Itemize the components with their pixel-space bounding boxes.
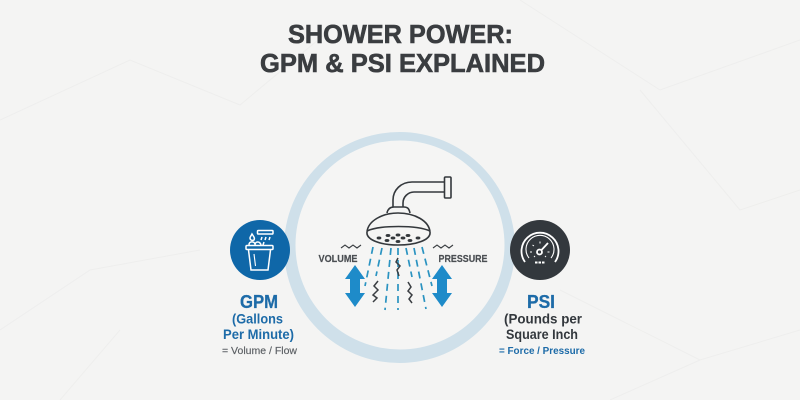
icon: gauge bbox=[510, 220, 570, 280]
squiggles bbox=[373, 258, 412, 303]
PSI full name: (Pounds per bbox=[504, 310, 583, 326]
GPM full name: (Gallons bbox=[232, 310, 283, 326]
title bbox=[260, 21, 545, 78]
arrow: pressure bbox=[432, 265, 452, 307]
label: pressure bbox=[433, 245, 488, 265]
label: volume: VOLUME bbox=[318, 253, 358, 265]
title: SHOWER POWER: bbox=[288, 21, 513, 49]
PSI block bbox=[499, 220, 585, 357]
arrow: volume bbox=[345, 265, 365, 307]
GPM heading: GPM bbox=[240, 292, 278, 312]
icon: shower head bbox=[367, 177, 451, 245]
label: volume bbox=[318, 245, 361, 265]
GPM description: = Volume / Flow bbox=[222, 345, 297, 357]
PSI full name: Square Inch bbox=[506, 326, 578, 342]
PSI heading: PSI bbox=[527, 292, 555, 312]
GPM full name: Per Minute) bbox=[223, 326, 294, 342]
PSI full name bbox=[504, 310, 583, 342]
title: GPM & PSI EXPLAINED bbox=[260, 50, 545, 78]
GPM full name bbox=[223, 310, 294, 342]
water streams bbox=[365, 247, 432, 310]
PSI description: = Force / Pressure bbox=[499, 345, 585, 357]
GPM block bbox=[222, 220, 297, 357]
label: pressure: PRESSURE bbox=[438, 253, 488, 265]
icon: bucket bbox=[230, 220, 290, 280]
central ring bbox=[284, 132, 515, 363]
